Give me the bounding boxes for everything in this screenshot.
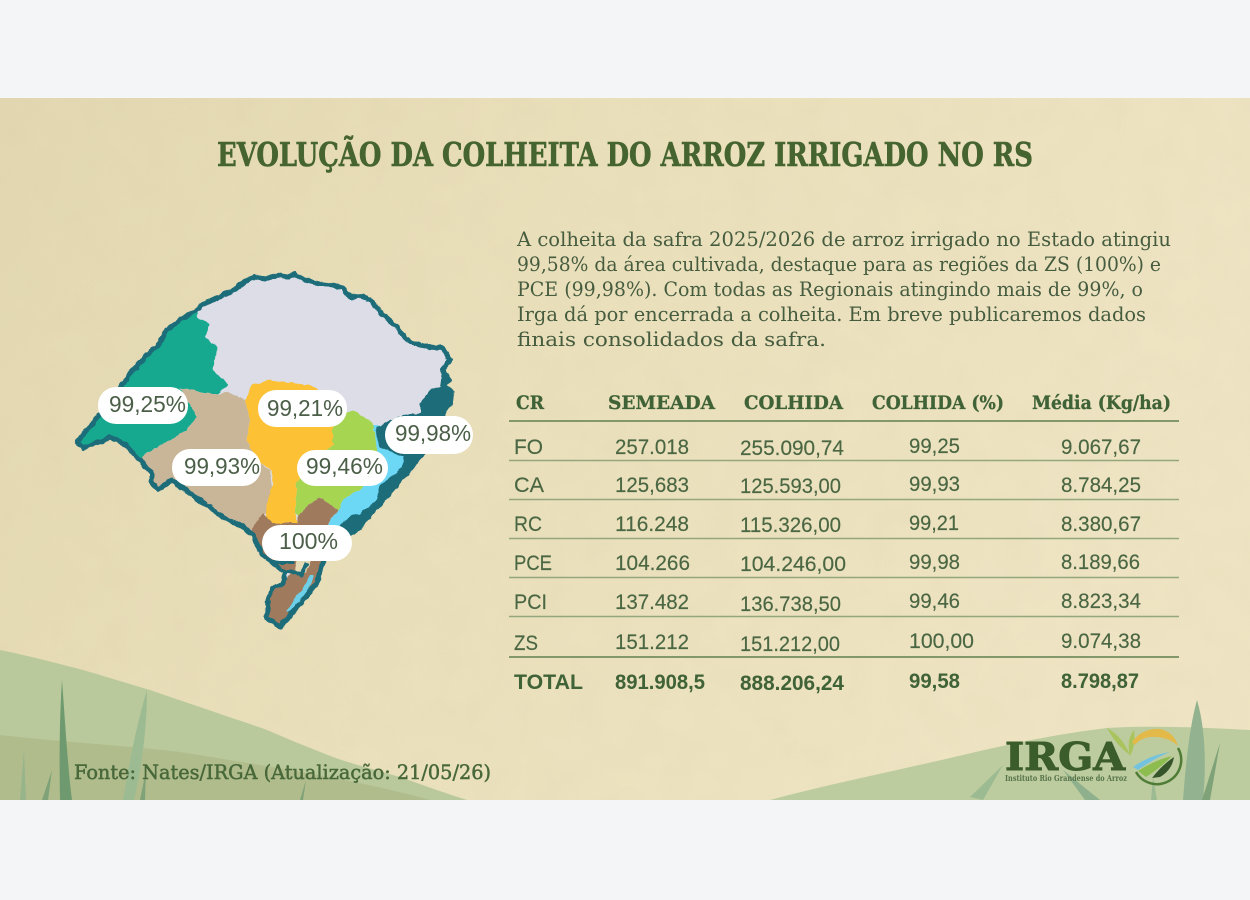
region: PCI green xyxy=(295,410,380,516)
row CA: 125.593,00 xyxy=(740,475,841,498)
row TOTAL: 888.206,24 xyxy=(740,672,844,695)
row PCI: 99,46 xyxy=(909,590,960,613)
inlet shore xyxy=(273,562,307,575)
region: RC yellow xyxy=(245,380,333,535)
row CA: 8.784,25 xyxy=(1061,474,1141,497)
row CA: CA xyxy=(514,474,544,497)
row ZS: 151.212 xyxy=(615,631,689,654)
row RC: 115.326,00 xyxy=(740,514,841,537)
map: Rio Grande do Sul harvest regions xyxy=(74,271,473,630)
source note: Fonte: Nates/IRGA (Atualização: 21/05/26) xyxy=(74,760,491,784)
label: FO 99,25%: 99,25% xyxy=(109,391,186,417)
row PCI: 8.823,34 xyxy=(1061,590,1141,613)
region: ZS brown xyxy=(250,498,340,630)
map outline xyxy=(77,274,452,627)
table header: COLHIDA xyxy=(744,392,843,414)
row ZS: 100,00 xyxy=(909,630,974,653)
row FO: 257.018 xyxy=(615,436,689,459)
row CA: 125,683 xyxy=(615,474,689,497)
table header: CR xyxy=(516,392,544,414)
text block: summary: 99,58% da área cultivada, destaque para as regiões da ZS (100%) e xyxy=(517,252,1161,276)
row CA xyxy=(514,473,1141,498)
label: RC 99,21% xyxy=(258,390,347,427)
label: CA 99,93%: 99,93% xyxy=(184,453,260,479)
row TOTAL: 8.798,87 xyxy=(1061,670,1139,693)
text block: summary: PCE (99,98%). Com todas as Regionais atingindo mais de 99%, o xyxy=(517,277,1143,301)
inlet xyxy=(295,561,311,573)
map shapes xyxy=(74,271,454,630)
label: ZS 100%: 100% xyxy=(279,528,338,554)
row ZS xyxy=(514,630,1141,656)
logo: IRGA: IRGA xyxy=(1005,734,1126,779)
row PCE: 8.189,66 xyxy=(1061,551,1140,574)
title: EVOLUÇÃO DA COLHEITA DO ARROZ IRRIGADO NO RS xyxy=(217,135,1033,174)
logo: IRGA: Instituto Rio Grandense do Arroz xyxy=(1005,773,1127,783)
table: harvest by region xyxy=(509,392,1179,695)
row FO: 255.090,74 xyxy=(740,437,844,460)
row PCE: PCE xyxy=(514,552,552,575)
row RC: 8.380,67 xyxy=(1061,513,1141,536)
label: ZS 100% xyxy=(262,525,352,561)
row PCE: 104.246,00 xyxy=(740,553,846,576)
table header: COLHIDA (%) xyxy=(872,392,1004,414)
logo: IRGA xyxy=(1005,728,1181,784)
table header: SEMEADA xyxy=(608,392,715,414)
label: FO 99,25% xyxy=(98,387,188,424)
background: paper band xyxy=(0,98,1250,800)
label: PCI 99,46% xyxy=(297,450,388,486)
row CA: 99,93 xyxy=(909,473,960,496)
region: FO teal xyxy=(80,311,228,458)
row ZS: 9.074,38 xyxy=(1061,630,1141,653)
table header: Média (Kg/ha) xyxy=(1032,392,1171,414)
label: CA 99,93% xyxy=(172,449,261,486)
row RC: 99,21 xyxy=(909,512,959,535)
row PCI: 137.482 xyxy=(615,591,689,614)
row FO: 9.067,67 xyxy=(1061,436,1141,459)
region: north (no rice) xyxy=(144,277,447,578)
row TOTAL xyxy=(514,670,1139,695)
row RC xyxy=(514,512,1141,537)
row PCI: 136.738,50 xyxy=(740,593,841,616)
text block: summary: Irga dá por encerrada a colheita. Em breve publicaremos dados xyxy=(517,302,1146,326)
row TOTAL: 99,58 xyxy=(909,670,960,693)
row FO xyxy=(514,435,1141,460)
label: PCI 99,46%: 99,46% xyxy=(306,453,383,479)
region: PCE light blue xyxy=(328,425,404,526)
row FO: FO xyxy=(514,436,543,459)
row FO: 99,25 xyxy=(909,435,960,458)
row PCI xyxy=(514,590,1141,616)
row RC: RC xyxy=(514,513,542,536)
logo emblem: rice and fields xyxy=(1107,728,1181,784)
text block: summary xyxy=(516,227,1171,351)
row TOTAL: TOTAL xyxy=(514,671,583,694)
label: PCE 99,98% xyxy=(385,416,473,454)
label: PCE 99,98%: 99,98% xyxy=(395,420,471,446)
row ZS: ZS xyxy=(514,632,538,655)
row PCE: 99,98 xyxy=(909,551,960,574)
text block: summary: A colheita da safra 2025/2026 de arroz irrigado no Estado atingiu xyxy=(516,227,1171,251)
region: lagoon xyxy=(287,575,314,612)
row RC: 116.248 xyxy=(615,513,689,536)
row PCE: 104.266 xyxy=(615,552,690,575)
row TOTAL: 891.908,5 xyxy=(615,671,705,694)
label: RC 99,21%: 99,21% xyxy=(267,395,343,421)
region: ZS dark teal xyxy=(340,374,450,532)
row ZS: 151.212,00 xyxy=(740,633,840,656)
row PCI: PCI xyxy=(514,591,547,614)
region: CA tan xyxy=(142,388,272,530)
row PCE xyxy=(514,551,1140,576)
text block: summary: finais consolidados da safra. xyxy=(517,327,826,351)
table header xyxy=(516,392,1171,414)
